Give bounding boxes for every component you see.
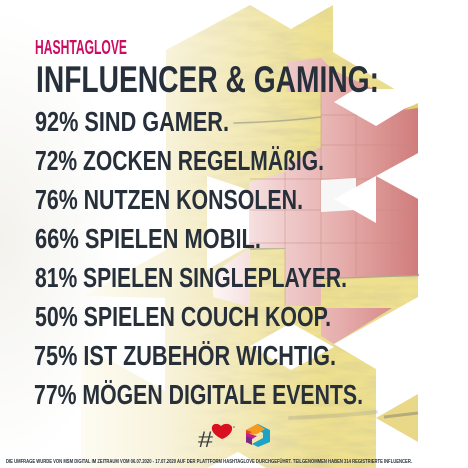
hash sign: # <box>198 427 214 452</box>
yellow sliver <box>404 103 418 110</box>
kicker: hashtaglove: HASHTAGLOVE <box>35 36 127 59</box>
page background <box>0 0 120 468</box>
light square <box>321 178 356 212</box>
white cut-outs <box>207 89 420 468</box>
background photo collage <box>81 0 420 468</box>
stat: couch koop: 50% SPIELEN COUCH KOOP. <box>35 301 331 332</box>
stat: mobil: 66% SPIELEN MOBIL. <box>35 223 261 254</box>
wall cracks <box>234 117 418 418</box>
icon: heart <box>212 424 232 439</box>
stat: singleplayer: 81% SPIELEN SINGLEPLAYER. <box>35 262 347 293</box>
logo: msm digital <box>246 424 270 447</box>
pink tile wall <box>249 58 418 306</box>
stat: events: 77% MÖGEN DIGITALE EVENTS. <box>34 379 363 410</box>
registered mark <box>233 426 235 428</box>
pink tile left <box>213 248 250 307</box>
logo: hashtaglove <box>198 424 235 452</box>
small yellow triangle <box>376 394 418 442</box>
stat: konsolen: 76% NUTZEN KONSOLEN. <box>35 184 303 215</box>
pink tile lower <box>321 308 392 344</box>
tile grid <box>250 92 418 306</box>
wall texture <box>246 6 418 468</box>
stat: regelmäßig: 72% ZOCKEN REGELMÄßIG. <box>35 145 324 176</box>
yellow wall shape <box>81 5 418 468</box>
stat: zubehör: 75% IST ZUBEHÖR WICHTIG. <box>34 340 336 371</box>
stats list <box>34 106 363 410</box>
stat: gamer: 92% SIND GAMER. <box>35 106 229 137</box>
